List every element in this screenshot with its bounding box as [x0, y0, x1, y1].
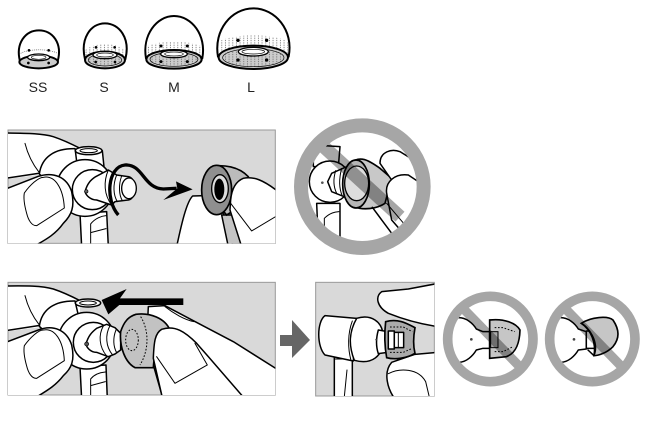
prohibited: ear tip crooked	[550, 296, 635, 382]
size labels: M	[168, 79, 180, 95]
prohibited: wrong removal	[301, 125, 428, 248]
removal arrow	[110, 165, 177, 215]
ear tip sizes	[19, 8, 290, 95]
size labels: S	[99, 79, 109, 95]
hand and earbud	[3, 133, 136, 247]
panel: removing the ear tip	[3, 130, 278, 247]
shallow drawing	[458, 317, 521, 363]
panel: attaching the ear tip	[3, 282, 278, 400]
size labels: SS	[29, 79, 47, 95]
seated ear tip	[385, 321, 415, 359]
lower finger	[386, 352, 434, 396]
push arrow	[102, 289, 183, 314]
size labels	[29, 79, 255, 95]
arrow: next step	[280, 320, 310, 358]
ear tip M	[145, 16, 203, 69]
hand and earbud	[3, 286, 121, 399]
ear tip SS	[19, 30, 59, 68]
earbud side view	[319, 316, 388, 399]
upper finger	[378, 283, 438, 327]
ear tip L	[217, 8, 290, 69]
thumb and removed ear tip	[177, 165, 278, 247]
size labels: L	[247, 79, 255, 95]
ear tip between fingers	[120, 306, 278, 400]
wrong removal drawing	[308, 145, 416, 236]
prohibited: ear tip too shallow	[448, 296, 533, 382]
crooked drawing	[560, 316, 619, 363]
panel: correctly attached ear tip	[316, 282, 438, 400]
ear tip S	[84, 23, 127, 68]
